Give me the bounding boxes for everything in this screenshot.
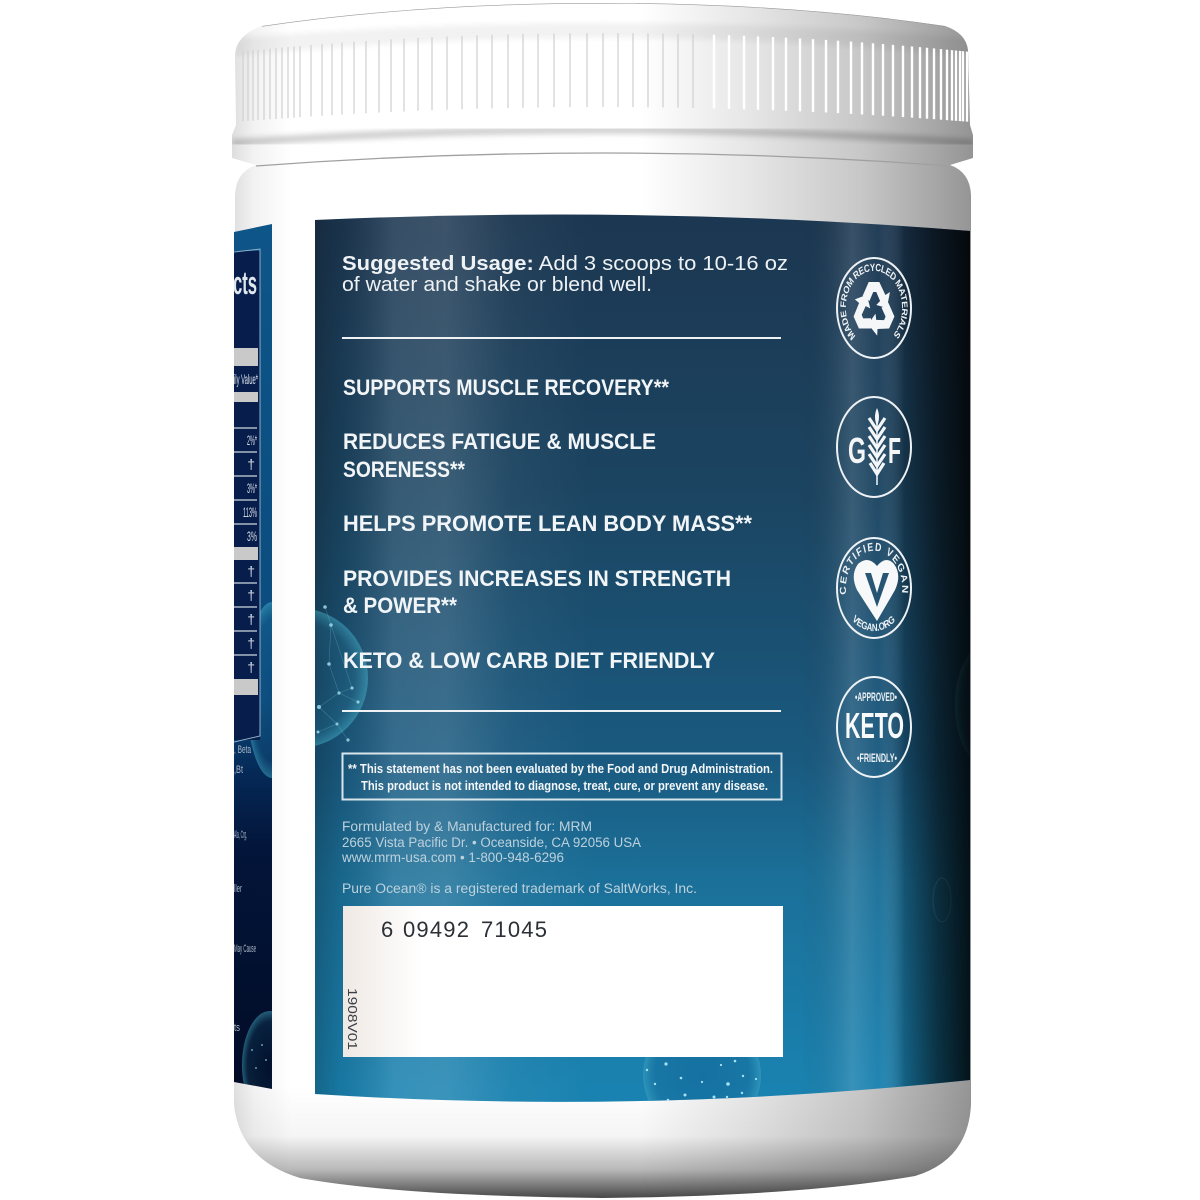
ingredient text fragments: ller (234, 883, 242, 895)
badge: certified vegan (836, 537, 912, 639)
barcode panel (343, 906, 783, 1057)
nutrition table: † (247, 611, 255, 627)
cap collar groove (232, 130, 973, 143)
manufacturer details: Formulated by & Manufactured for: MRM (342, 819, 592, 834)
ingredient text fragments (234, 744, 256, 1034)
panel heading fragment: cts (233, 265, 257, 301)
icon: wheat stalk (869, 408, 885, 485)
badge: keto friendly: KETO (845, 705, 904, 746)
barcode panel: 71045 (481, 917, 548, 942)
barcode panel: 09492 (403, 917, 470, 942)
badge: gluten free (837, 397, 911, 497)
FDA disclaimer box: ** This statement has not been evaluated by the Food and Drug Administration. (348, 761, 773, 776)
barcode panel: 6 (381, 917, 394, 942)
badge: keto friendly: •FRIENDLY• (857, 751, 897, 765)
ingredient text fragments: ts (234, 1022, 240, 1034)
icon: vegan heart (854, 560, 898, 621)
benefits list: HELPS PROMOTE LEAN BODY MASS** (343, 511, 752, 536)
product tub infographic (232, 3, 973, 1198)
benefits list: SUPPORTS MUSCLE RECOVERY** (343, 375, 669, 400)
cap top edge (262, 3, 945, 26)
cap base seam (256, 153, 950, 166)
icon: recycling arrows (848, 282, 897, 341)
lower panel globe (242, 1011, 272, 1089)
left network globe (315, 605, 368, 746)
main back label (315, 214, 970, 1102)
nutrition table: 2%* (247, 432, 257, 448)
benefits list: KETO & LOW CARB DIET FRIENDLY (343, 648, 715, 673)
badge: made from recycled materials: MADE FROM RECYCLED MATERIALS (840, 264, 908, 341)
nutrition table: 3%* (247, 480, 257, 496)
cap dome shading (236, 23, 970, 56)
FDA disclaimer box: This product is not intended to diagnose, treat, cure, or prevent any disease. (361, 778, 768, 793)
ingredient text fragments: Ala, Crg, (234, 829, 247, 841)
left side panel: nutrition facts: 113% (243, 504, 257, 520)
manufacturer details: 2665 Vista Pacific Dr. • Oceanside, CA 92056 USA (342, 835, 641, 850)
nutrition table: † (247, 563, 255, 579)
manufacturer details (341, 819, 697, 896)
manufacturer details: Pure Ocean® is a registered trademark of SaltWorks, Inc. (342, 881, 697, 896)
bottle body and cap silhouette (225, 0, 980, 1200)
nutrition table: † (247, 456, 255, 472)
nutrition table: † (247, 659, 255, 675)
badge: certified vegan: VEGAN.ORG (854, 614, 894, 632)
small faint globe (933, 878, 951, 922)
suggested usage (342, 253, 788, 296)
benefits list: & POWER** (343, 593, 457, 618)
bottom network globe (643, 1057, 761, 1101)
benefits list: REDUCES FATIGUE & MUSCLE (343, 429, 656, 454)
left side panel: nutrition facts (234, 224, 272, 1089)
suggested usage: Suggested Usage: Add 3 scoops to 10-16 oz (342, 253, 788, 275)
FDA disclaimer box (342, 754, 782, 800)
badge: certified vegan: CERTIFIED VEGAN (840, 542, 908, 594)
benefits list: PROVIDES INCREASES IN STRENGTH (343, 566, 731, 591)
ingredient text fragments: , Beta (234, 744, 252, 756)
badge: keto friendly: •APPROVED• (855, 690, 897, 704)
left side panel: nutrition facts: May Cause (234, 943, 256, 955)
nutrition table: 3% (247, 528, 257, 544)
benefits list (343, 375, 752, 673)
nutrition table: † (247, 587, 255, 603)
panel globe (250, 602, 272, 778)
left side panel: nutrition facts: ily Value* (234, 371, 258, 387)
ingredient text fragments: ,Bt (234, 764, 243, 776)
nutrition table: † (247, 635, 255, 651)
badge: gluten free: G (848, 430, 866, 471)
benefits list: SORENESS** (343, 457, 465, 482)
badge: keto friendly (837, 677, 911, 777)
nutrition table (233, 249, 260, 742)
suggested usage: of water and shake or blend well. (342, 274, 652, 296)
right network globe (955, 660, 966, 748)
cap ribs (242, 33, 968, 122)
lot code: 1908V01 (345, 988, 359, 1050)
badge: gluten free: F (888, 430, 901, 471)
manufacturer details: www.mrm-usa.com • 1-800-948-6296 (341, 850, 564, 865)
